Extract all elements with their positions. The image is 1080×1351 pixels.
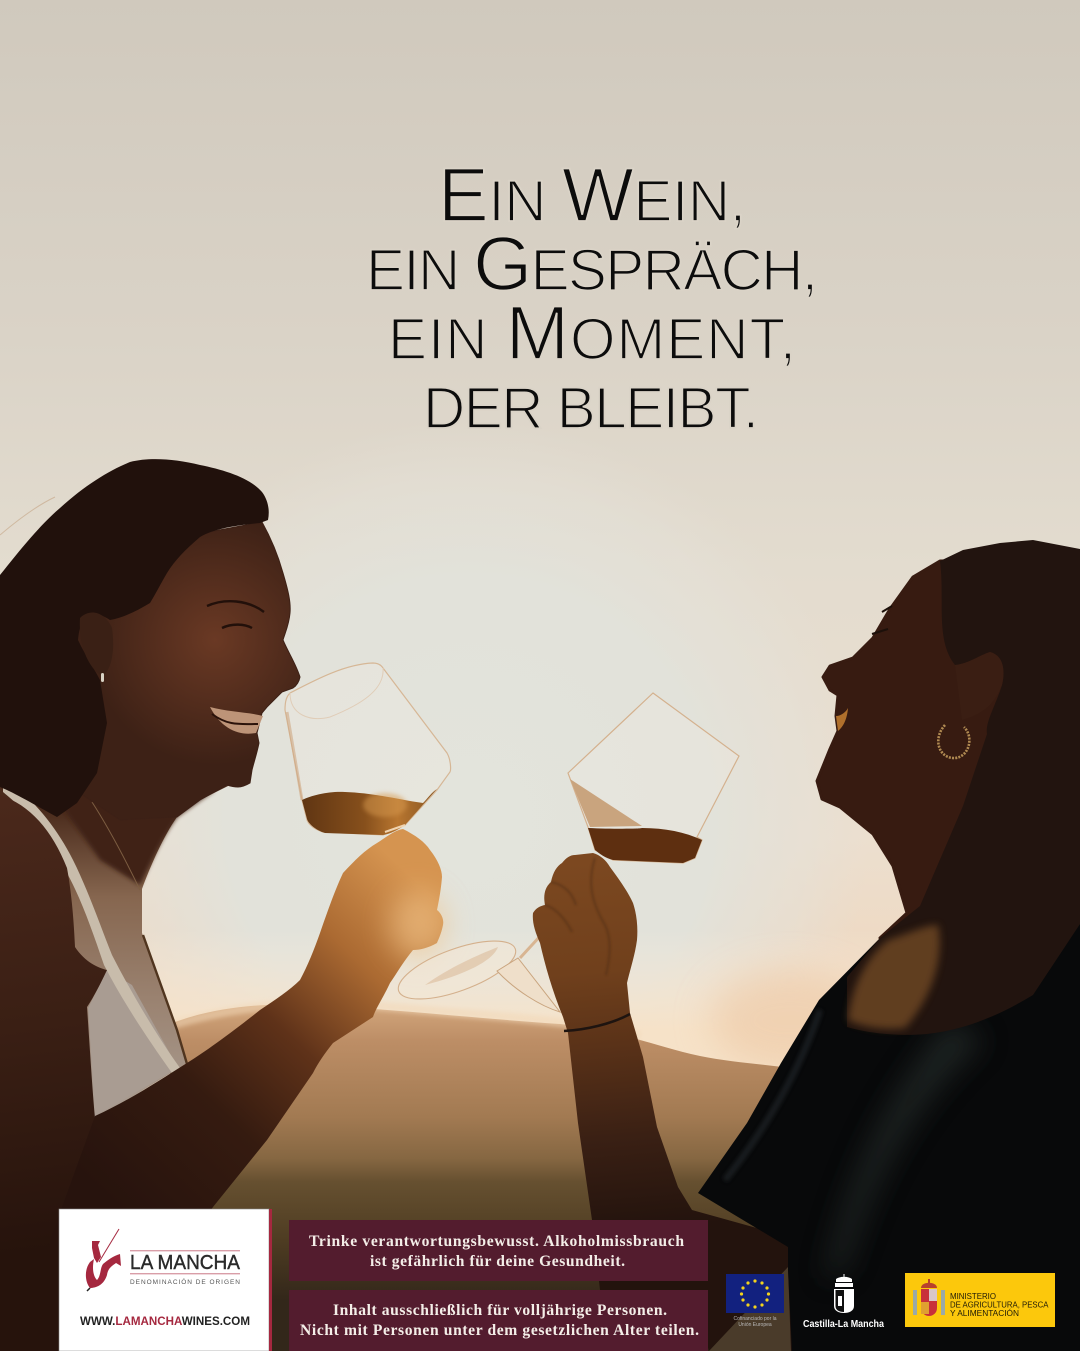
neck shading [50, 790, 215, 885]
forearm and hand [533, 853, 800, 1351]
eye and brow [207, 601, 264, 628]
earring [938, 725, 969, 758]
glass left edge shading [287, 712, 302, 800]
left woman [0, 459, 446, 1351]
title: EIN MOMENT, [388, 291, 796, 376]
logo: European Union: Cofinanciado por la [733, 1316, 777, 1322]
lit lips [836, 708, 848, 731]
title [366, 153, 818, 441]
notice: responsible drinking: ist gefährlich für deine Gesundheit. [370, 1253, 625, 1270]
shirt [698, 924, 1080, 1351]
wine: left [302, 789, 437, 835]
head base [60, 522, 300, 820]
title: DER BLEIBT. [423, 376, 759, 441]
eyelashes [872, 606, 892, 634]
neck and chest skin [0, 780, 240, 1120]
wine glass: right [392, 693, 739, 1012]
flyaway hair strands [0, 497, 55, 535]
website url: WWW.LAMANCHAWINES.COM [80, 1316, 250, 1328]
ear [80, 613, 113, 676]
notice: adults only [289, 1290, 708, 1351]
logo: European Union: Unión Europea [738, 1322, 772, 1328]
sleeve gap highlight [709, 1267, 791, 1351]
dress edge [143, 935, 187, 1064]
title: EIN WEIN, [438, 153, 746, 238]
hair [0, 459, 269, 817]
wordmark: LA MANCHA [130, 1252, 241, 1274]
hair [847, 540, 1080, 1035]
wordmark [130, 1250, 241, 1286]
notice: adults only: Nicht mit Personen unter dem gesetzlichen Alter teilen. [300, 1322, 699, 1339]
logo: Ministerio de Agricultura [905, 1273, 1055, 1327]
forearm and hand [50, 829, 443, 1351]
logo: Ministerio de Agricultura: MINISTERIO [950, 1292, 996, 1301]
logo: European Union [726, 1274, 784, 1328]
shoulder [0, 795, 107, 1351]
wordmark: DENOMINACIÓN DE ORIGEN [130, 1277, 240, 1286]
right woman [533, 540, 1080, 1351]
sun glow on hand [390, 891, 446, 959]
sunlit hair [848, 925, 940, 1029]
glass rim [290, 668, 383, 719]
shirt sheen [825, 1020, 985, 1280]
earring [101, 673, 104, 682]
wine: right [588, 828, 702, 863]
background: hills [170, 1004, 800, 1351]
fingers [545, 858, 610, 975]
notice: adults only: Inhalt ausschließlich für volljährige Personen. [333, 1302, 667, 1319]
notice: responsible drinking: Trinke verantwortungsbewusst. Alkoholmissbrauch [309, 1233, 684, 1250]
icon: knight on horseback [86, 1229, 121, 1291]
necklace [92, 802, 140, 890]
logo: Ministerio de Agricultura: DE AGRICULTURA, PESCA [950, 1300, 1049, 1310]
wine glass: left [285, 663, 451, 835]
logo panel: La Mancha [59, 1209, 272, 1351]
teeth and mouth [210, 707, 263, 734]
wine residue [570, 779, 642, 827]
title: EIN GESPRÄCH, [366, 222, 818, 307]
logo: Ministerio de Agricultura: Y ALIMENTACIÓN [950, 1308, 1019, 1318]
bracelet [564, 1014, 630, 1031]
face and neck [817, 560, 1040, 1000]
icon: coat of arms of Spain [913, 1279, 945, 1316]
dress knit panel [88, 970, 178, 1116]
stem and foot [392, 907, 567, 1012]
notice: responsible drinking [289, 1220, 708, 1281]
ear [955, 652, 1004, 720]
logo: Castilla-La Mancha [803, 1274, 884, 1330]
dress strap [3, 785, 180, 1073]
logo: Castilla-La Mancha: Castilla-La Mancha [803, 1318, 884, 1330]
